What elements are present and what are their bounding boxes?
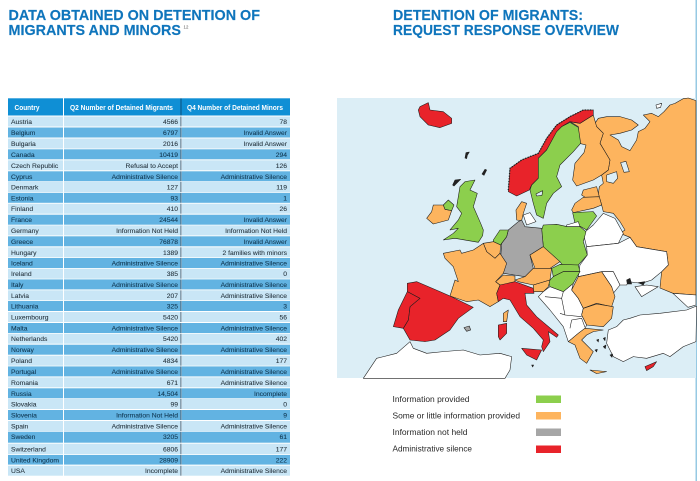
Ukraine — [578, 237, 668, 285]
row: Belgium: 6797 — [163, 130, 178, 137]
Germany — [501, 220, 543, 277]
row: Netherlands: Netherlands — [11, 336, 48, 343]
Danish islands — [523, 213, 536, 225]
row: Germany: Information Not Held — [116, 228, 178, 235]
Balearic Islands — [464, 326, 471, 331]
row: Austria — [8, 116, 290, 126]
row: Lithuania — [8, 301, 290, 311]
table header: Q2 Number of Detained Migrants — [70, 103, 173, 112]
row: Slovenia — [8, 410, 290, 420]
row: Iceland: Administrative Silence — [221, 260, 287, 268]
Ireland — [427, 205, 452, 224]
row: Finland: 26 — [279, 206, 287, 213]
row: Bulgaria: Invalid Answer — [243, 141, 288, 148]
row: Germany: Germany — [11, 228, 39, 235]
row: Russia: Russia — [11, 391, 32, 398]
row: Malta: Administrative Silence — [221, 326, 287, 332]
Russia — [595, 98, 696, 295]
France — [443, 243, 507, 307]
row: Malta: Malta — [11, 326, 28, 332]
small northern islands — [453, 152, 487, 186]
row: Switzerland: Switzerland — [11, 446, 46, 454]
row: Canada: 10419 — [159, 152, 178, 159]
row: Malta: Administrative Silence — [112, 326, 178, 332]
row: Denmark: 119 — [276, 184, 287, 192]
row: Switzerland: 177 — [276, 446, 287, 454]
row: Denmark: Denmark — [11, 184, 39, 192]
Austria — [515, 268, 552, 285]
row: Hungary — [8, 247, 290, 257]
row: Slovenia: Slovenia — [11, 412, 37, 420]
row: Iceland: Iceland — [11, 260, 33, 268]
row: Estonia: Estonia — [11, 195, 34, 202]
United Kingdom — [443, 180, 483, 242]
row: Slovakia: 0 — [283, 402, 287, 408]
row: Russia: Incomplete — [254, 391, 287, 398]
row: Estonia — [8, 193, 290, 203]
page edge line — [696, 0, 697, 481]
row: Cyprus — [8, 171, 290, 181]
row: Italy — [8, 279, 290, 289]
row: Portugal: Administrative Silence — [112, 369, 178, 376]
Crimea — [635, 285, 658, 297]
row: Russia — [8, 388, 290, 398]
row: Iceland — [8, 258, 290, 268]
row: USA: Administrative Silence — [221, 468, 287, 475]
row: Luxembourg — [8, 312, 290, 322]
Norwegian fjord coast — [508, 110, 593, 190]
row: Romania: Administrative Silence — [221, 380, 287, 387]
row: Norway — [8, 345, 290, 355]
Denmark — [516, 202, 527, 221]
row: Austria: Austria — [11, 119, 32, 126]
row: Czech Republic: Refusal to Accept — [125, 163, 178, 170]
Sardinia — [498, 323, 507, 340]
row: Norway: Norway — [11, 347, 35, 354]
Iceland — [418, 103, 452, 128]
Slovenia — [533, 280, 550, 292]
Lake Onega — [621, 161, 629, 172]
row: Hungary: 2 families with minors — [222, 250, 288, 257]
row: Denmark — [8, 182, 290, 192]
row: Poland: 4834 — [163, 358, 178, 365]
row: Italy: Administrative Silence — [221, 282, 287, 289]
title: right — [393, 8, 619, 39]
map of Europe — [337, 98, 697, 378]
row: Switzerland — [8, 444, 290, 454]
row: Hungary: Hungary — [11, 250, 37, 257]
row: Poland: Poland — [11, 358, 32, 365]
row: Ireland — [8, 269, 290, 279]
row: USA — [8, 466, 290, 476]
Poland — [532, 224, 587, 266]
row: Ireland: 0 — [283, 271, 287, 278]
Finland — [570, 115, 610, 186]
Turkey — [607, 306, 697, 362]
row: Portugal: Administrative Silence — [221, 369, 287, 376]
row: Romania: Romania — [11, 380, 38, 387]
row: Belgium — [8, 128, 290, 138]
row: France: 24544 — [159, 217, 178, 224]
row: Canada: Canada — [11, 152, 35, 159]
Aegean islands — [532, 278, 645, 367]
legend: administrative silence — [392, 444, 561, 454]
row: Lithuania: 325 — [167, 304, 178, 310]
row: Spain: Spain — [11, 424, 29, 430]
row: Slovakia — [8, 399, 290, 409]
row: Finland: 410 — [167, 206, 178, 213]
Balkan borders — [545, 292, 585, 328]
row: Luxembourg: 56 — [279, 314, 287, 322]
Bulgaria — [582, 304, 613, 327]
Belgium — [483, 242, 501, 258]
row: Slovakia: Slovakia — [11, 402, 37, 408]
row: Austria: 4566 — [163, 119, 178, 126]
title: left: 12 — [184, 24, 189, 30]
row: Ireland: 385 — [167, 271, 178, 278]
legend: information not held: Information not held — [392, 427, 468, 437]
Lake Ladoga — [607, 172, 618, 183]
Hungary — [548, 272, 580, 292]
map sea background — [337, 98, 696, 378]
row: Finland — [8, 204, 290, 214]
row: Portugal — [8, 366, 290, 376]
row: Netherlands: 5420 — [163, 336, 178, 343]
row: Romania — [8, 377, 290, 387]
row: France — [8, 215, 290, 225]
row: Cyprus: Administrative Silence — [112, 174, 178, 181]
row: United Kingdom: United Kingdom — [11, 457, 59, 464]
row: Lithuania: 3 — [283, 304, 287, 310]
row: Bulgaria: Bulgaria — [11, 141, 36, 148]
southern countries — [363, 213, 697, 378]
title: left: DATA OBTAINED ON DETENTION OF — [8, 8, 260, 24]
row: Finland: Finland — [11, 206, 33, 213]
row: Bulgaria: 2016 — [163, 141, 178, 148]
Portugal — [393, 292, 420, 328]
Cyprus — [645, 362, 657, 371]
Norway — [508, 110, 593, 196]
legend: information provided: Information provided — [392, 394, 470, 404]
Estonia — [582, 187, 599, 198]
row: Netherlands: 402 — [276, 336, 287, 343]
North Africa — [363, 342, 512, 378]
row: Austria: 78 — [279, 119, 287, 126]
row: Greece: Invalid Answer — [243, 239, 288, 246]
Czech Republic — [530, 247, 560, 268]
Switzerland — [496, 275, 515, 285]
row: Cyprus: Cyprus — [11, 174, 33, 181]
row: Denmark: 127 — [167, 184, 178, 192]
table: detained migrants and minors — [8, 98, 290, 476]
row: Belgium: Invalid Answer — [243, 130, 288, 137]
row: USA: USA — [11, 468, 25, 475]
row: United Kingdom — [8, 455, 290, 465]
row: United Kingdom: 28909 — [159, 457, 178, 464]
Lithuania — [573, 212, 597, 230]
Northern Ireland — [443, 200, 454, 211]
row: Latvia: 207 — [167, 293, 178, 300]
Belarus — [583, 213, 623, 247]
row: Germany — [8, 225, 290, 235]
Kaliningrad — [567, 222, 580, 227]
row: USA: Incomplete — [145, 468, 178, 475]
row: Czech Republic: Czech Republic — [11, 163, 59, 170]
title: right: REQUEST RESPONSE OVERVIEW — [393, 23, 619, 39]
legend: administrative silence: Administrative silence — [392, 444, 472, 454]
Arctic island — [656, 103, 662, 108]
row: Sweden: Sweden — [11, 434, 36, 441]
row: Luxembourg: Luxembourg — [11, 314, 49, 322]
row: Poland: 177 — [276, 358, 287, 365]
Sweden — [530, 122, 581, 218]
row: Italy: Italy — [11, 282, 24, 289]
row: Greece: Greece — [11, 239, 33, 246]
Spain — [403, 282, 473, 342]
row: Latvia: Administrative Silence — [221, 293, 287, 300]
Slovakia — [552, 264, 580, 277]
northern countries — [418, 98, 696, 295]
Greece — [568, 328, 603, 363]
row: Russia: 14,504 — [157, 391, 178, 398]
row: Latvia: Latvia — [11, 293, 29, 300]
row: Netherlands — [8, 334, 290, 344]
row: Slovenia: Information Not Held — [116, 412, 178, 420]
title: left — [8, 8, 260, 39]
table header: Q4 Number of Detained Minors — [187, 103, 283, 112]
row: Malta — [8, 323, 290, 333]
row: Norway: Administrative Silence — [221, 347, 287, 354]
row: Switzerland: 6806 — [163, 446, 178, 454]
Moldova — [602, 272, 620, 293]
row: France: France — [11, 217, 32, 224]
row: Sweden: 3205 — [163, 434, 178, 441]
row: Spain: Administrative Silence — [221, 424, 287, 430]
row: Italy: Administrative Silence — [112, 282, 178, 289]
row: Bulgaria — [8, 138, 290, 148]
row: Slovakia: 99 — [170, 402, 178, 408]
Italy — [497, 282, 558, 352]
legend — [392, 394, 561, 454]
Caucasus — [673, 293, 696, 307]
row: Czech Republic: 126 — [276, 163, 287, 170]
title: right: DETENTION OF MIGRANTS: — [393, 8, 583, 24]
row: Sweden: 61 — [279, 434, 287, 441]
Latvia — [572, 197, 602, 213]
table header: Country — [14, 103, 40, 112]
legend: information not held — [392, 427, 561, 437]
row: Canada: 294 — [276, 152, 287, 159]
row: Greece — [8, 236, 290, 246]
row: United Kingdom: 222 — [276, 457, 287, 464]
row: Canada — [8, 149, 290, 159]
row: Sweden — [8, 432, 290, 443]
legend: some or little information provided: Some or little information provided — [392, 411, 520, 421]
Romania — [572, 272, 615, 308]
row: Slovenia: 9 — [283, 412, 287, 420]
row: Norway: Administrative Silence — [112, 347, 178, 354]
row: Luxembourg: 5420 — [163, 314, 178, 322]
row: Ireland: Ireland — [11, 271, 32, 278]
row: Portugal: Portugal — [11, 369, 37, 376]
row: Czech Republic — [8, 160, 290, 170]
row: Romania: 671 — [167, 380, 178, 387]
row: Estonia: 93 — [170, 195, 178, 202]
row: Lithuania: Lithuania — [11, 304, 39, 310]
row: Germany: Information Not Held — [225, 228, 287, 235]
row: Iceland: Administrative Silence — [112, 260, 178, 268]
Netherlands — [493, 230, 508, 245]
row: Cyprus: Administrative Silence — [221, 174, 287, 181]
Crete — [590, 370, 607, 374]
row: Hungary: 1389 — [163, 250, 178, 257]
Swedish lake — [536, 191, 543, 196]
row: Spain — [8, 421, 290, 431]
row: Latvia — [8, 290, 290, 300]
Corsica — [503, 310, 508, 322]
row: France: Invalid Answer — [243, 217, 288, 224]
row: Belgium: Belgium — [11, 130, 36, 137]
Balkans — [538, 283, 587, 342]
legend: information provided — [392, 394, 561, 404]
row: Poland — [8, 356, 290, 366]
row: Spain: Administrative Silence — [112, 424, 178, 430]
row: Greece: 76878 — [159, 239, 178, 246]
table header — [8, 98, 290, 116]
title: left: MIGRANTS AND MINORS — [8, 23, 181, 39]
row: Estonia: 1 — [283, 195, 287, 202]
Sicily — [522, 348, 542, 360]
